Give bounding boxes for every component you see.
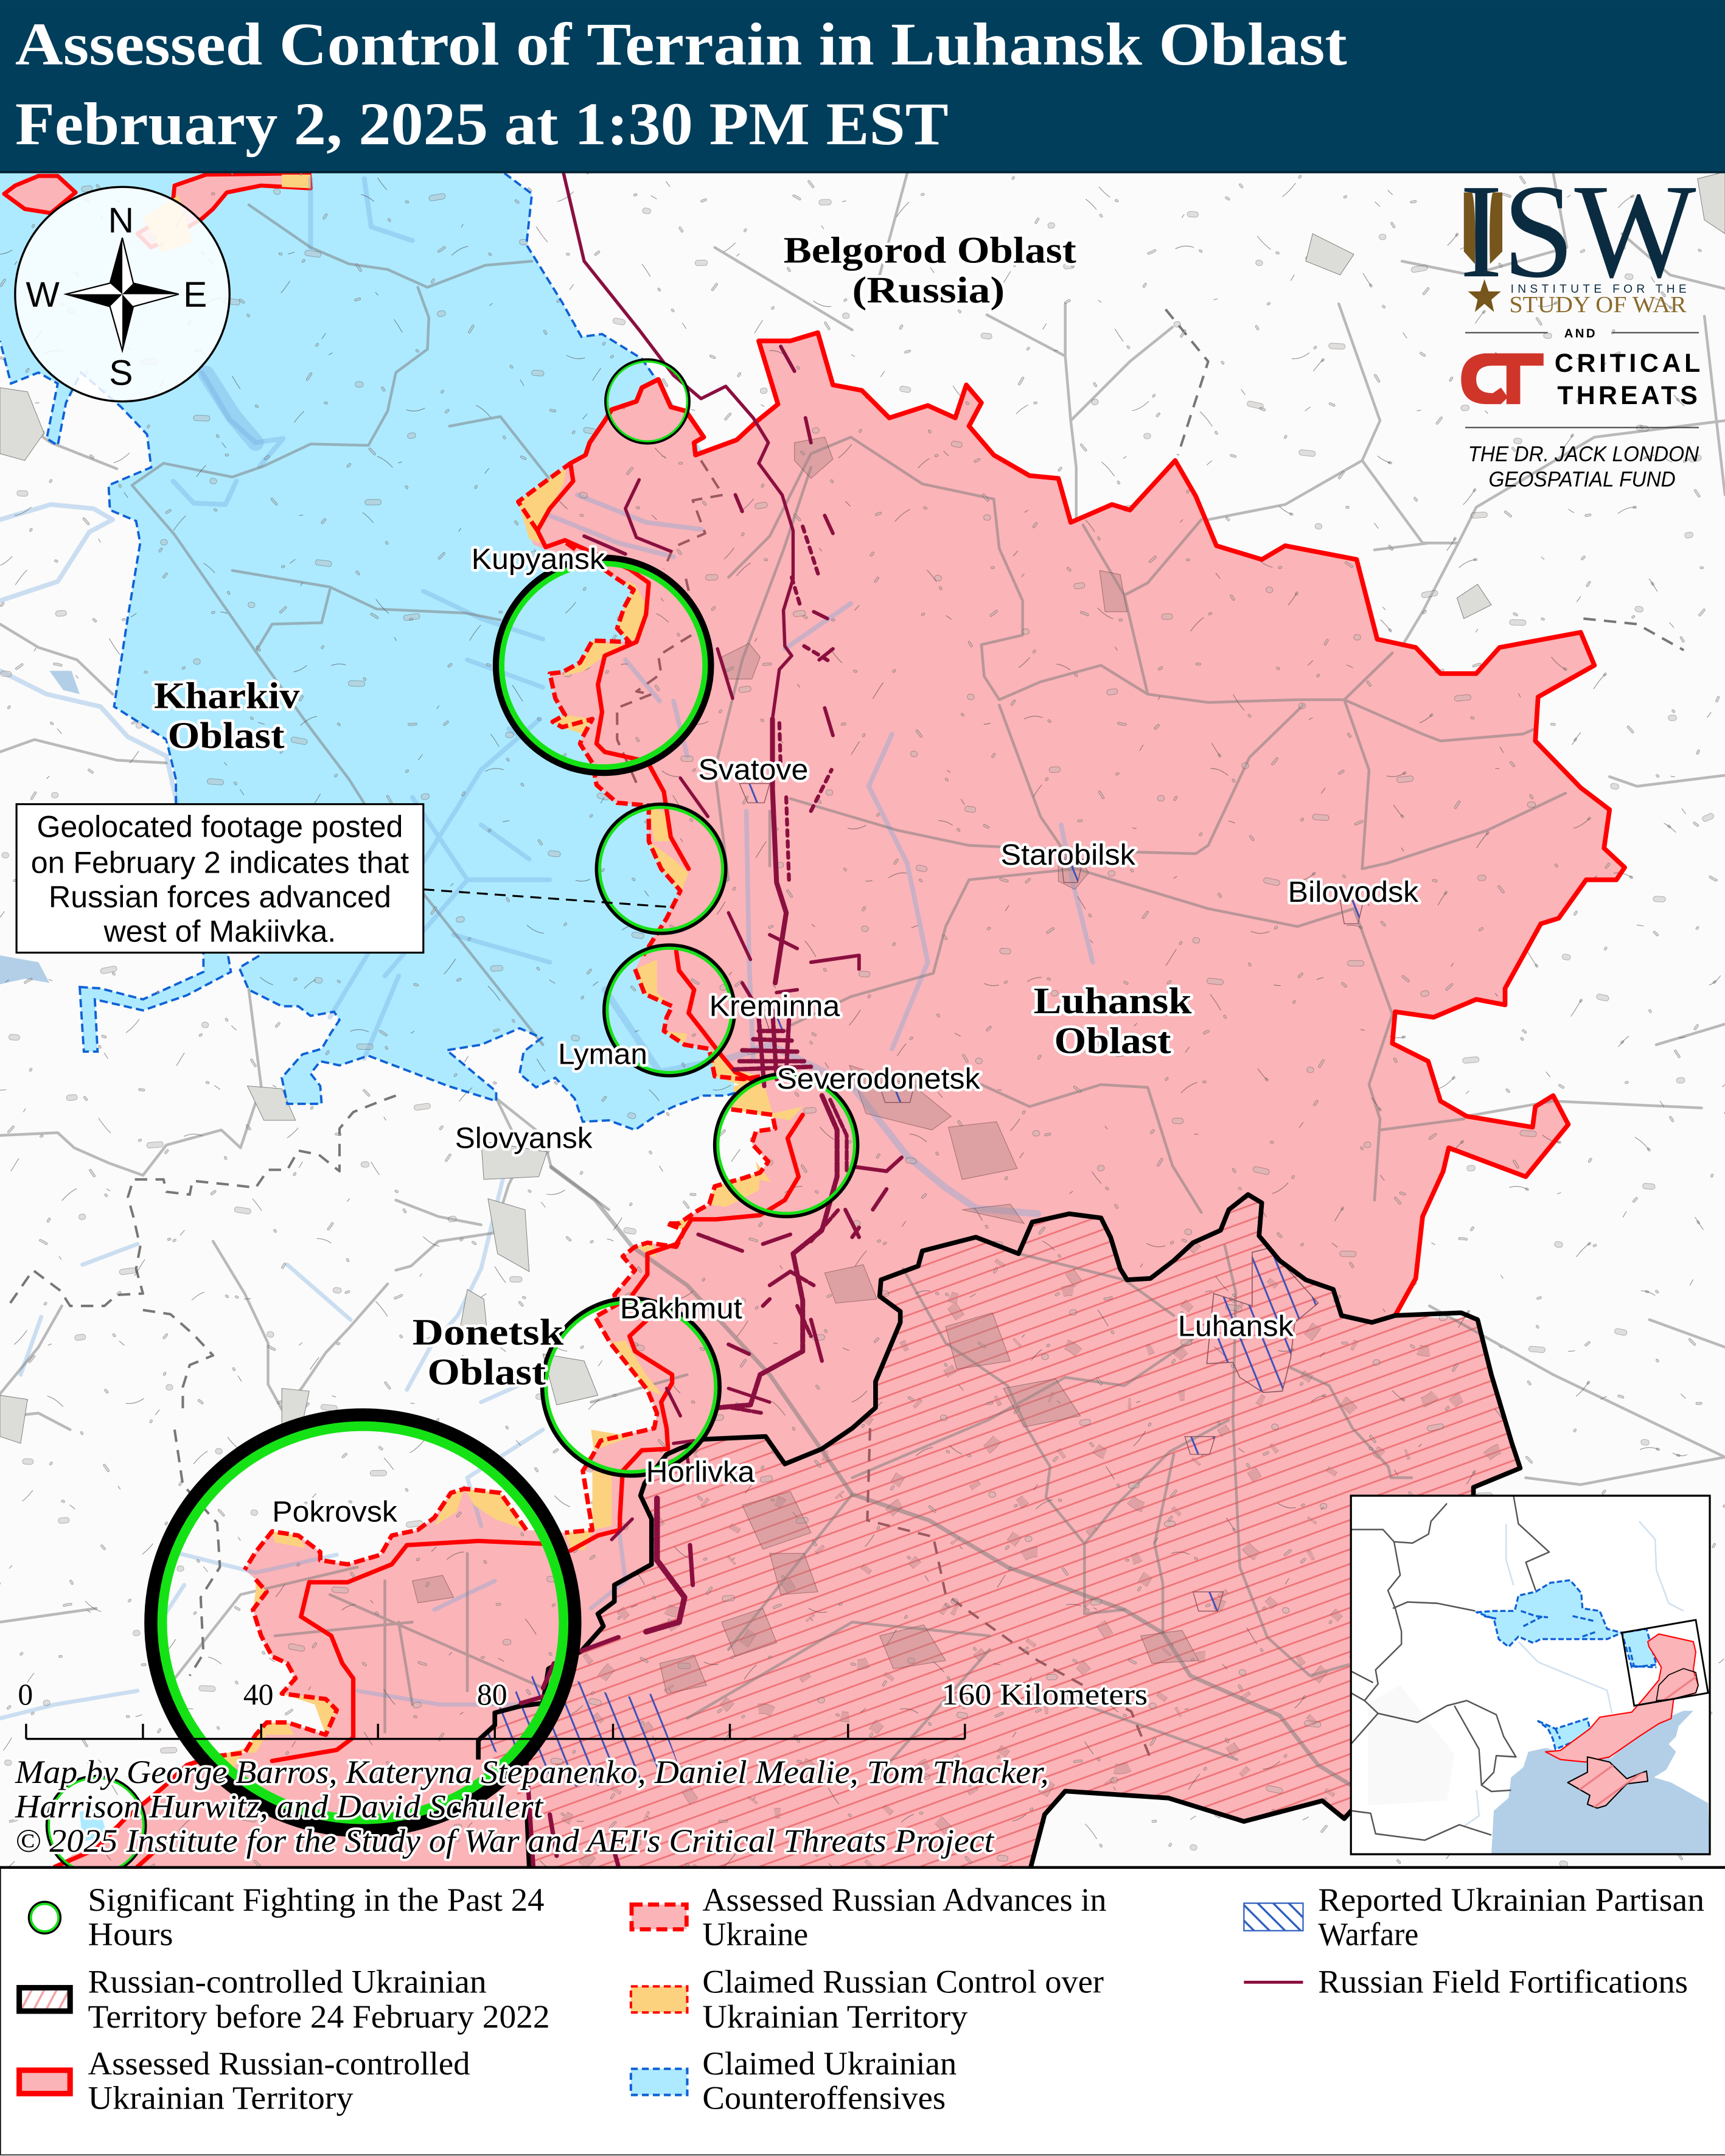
pre-2022 line of control [478, 1195, 1520, 1867]
inset: area of interest box [1622, 1620, 1708, 1706]
legend item: claimed Ukrainian counteroffensives: Counteroffensives [702, 2079, 946, 2116]
city label: Svatove: Svatove [699, 753, 808, 786]
inset: counteroffensive interior lines [1484, 1611, 1656, 1739]
legend item: Russian advances: Ukraine [702, 1916, 808, 1952]
callout: Makiivka advance: Geolocated footage posted [37, 810, 403, 844]
scale bar [18, 1678, 1148, 1739]
rivers [0, 179, 1093, 1718]
scale bar: 0 [18, 1678, 33, 1711]
Critical Threats logo [1461, 349, 1700, 410]
compass rose [15, 187, 229, 402]
legend item: assessed Russian control: Ukrainian Territory [88, 2079, 354, 2116]
header banner: Assessed Control of Terrain in Luhansk Oblast [15, 11, 1347, 78]
legend item: significant fighting: Hours [88, 1916, 173, 1952]
fighting circle: southwest [47, 1776, 145, 1875]
legend item: claimed Russian control: Ukrainian Territory [702, 1998, 967, 2035]
city label: Horlivka: Horlivka [646, 1456, 754, 1488]
legend item: Ukrainian partisan warfare: Reported Ukrainian Partisan [1318, 1882, 1704, 1918]
fighting circle: Kupyansk [496, 558, 711, 773]
lakes west of Kharkiv Oblast [0, 671, 80, 984]
oblast boundaries [9, 309, 1684, 1758]
scale bar: 160 Kilometers [941, 1678, 1148, 1711]
hatching: Russian-controlled territory before 24 February 2022 [478, 1195, 1520, 1867]
legend item: Ukrainian partisan warfare [1244, 1882, 1704, 1952]
region label: Kharkiv Oblast: Kharkiv [154, 675, 300, 716]
inset: sea [1477, 1711, 1710, 1854]
callout: Makiivka advance: on February 2 indicates that [31, 845, 409, 879]
city label: Luhansk: Luhansk [1178, 1310, 1294, 1343]
urban areas on occupied territory [413, 437, 1199, 1694]
header banner: February 2, 2025 at 1:30 PM EST [15, 91, 949, 158]
inset: occupied territory [1546, 1634, 1698, 1762]
inset: Crimea [1567, 1757, 1648, 1808]
ISW logo: STUDY OF WAR [1509, 292, 1687, 318]
callout: Makiivka advance: Russian forces advanced [49, 880, 391, 914]
Critical Threats logo: THREATS [1557, 381, 1698, 410]
Critical Threats logo: CRITICAL [1555, 349, 1700, 378]
assessed Russian control: inner front lines [55, 455, 803, 1867]
legend item: significant fighting [29, 1882, 545, 1952]
terrain: Ukrainian-claimed counteroffensive area [0, 173, 736, 1130]
Jack London Geospatial Fund credit: THE DR. JACK LONDON [1468, 442, 1699, 466]
city label: Pokrovsk: Pokrovsk [272, 1496, 398, 1529]
region label: Donetsk Oblast: Donetsk [413, 1312, 563, 1353]
callout: Makiivka advance [16, 804, 423, 952]
region label: Luhansk Oblast [1034, 981, 1192, 1061]
assessed Russian advances: dashed front line [212, 463, 775, 1757]
roads [0, 173, 1725, 1787]
compass rose: S [109, 354, 133, 393]
header banner [0, 0, 1725, 173]
Jack London Geospatial Fund credit [1465, 428, 1699, 492]
scale bar: 80 [477, 1678, 507, 1711]
fighting circle: Severodonetsk [715, 1073, 858, 1216]
map credits: Harrison Hurwitz, and David Schulert [15, 1788, 544, 1824]
inset: rivers [1464, 1521, 1684, 1826]
region label: Luhansk Oblast: Oblast [1054, 1020, 1171, 1061]
callout leader line [423, 890, 674, 907]
ISW logo: INSTITUTE FOR THE [1511, 283, 1687, 296]
region label: Kharkiv Oblast [154, 675, 300, 756]
legend item: claimed Russian control: Claimed Russian Control over [702, 1963, 1104, 2000]
legend item: pre-2022 Russian control: Russian-controlled Ukrainian [88, 1963, 487, 2000]
inset: international borders [1351, 1496, 1549, 1840]
region label: Luhansk Oblast: Luhansk [1034, 981, 1192, 1022]
region label: Belgorod Oblast (Russia): (Russia) [852, 270, 1005, 311]
fighting circle: north border [605, 360, 689, 444]
Jack London Geospatial Fund credit: GEOSPATIAL FUND [1488, 468, 1676, 492]
legend item: claimed Ukrainian counteroffensives: Claimed Ukrainian [702, 2045, 957, 2082]
legend item: Ukrainian partisan warfare: Warfare [1318, 1916, 1418, 1952]
legend item: claimed Russian control [631, 1963, 1104, 2035]
city label: Slovyansk: Slovyansk [455, 1122, 593, 1154]
region label: Donetsk Oblast [413, 1312, 563, 1393]
Russian field fortifications [521, 173, 902, 1867]
claimed Russian control areas [212, 467, 803, 1768]
legend item: assessed Russian control: Assessed Russian-controlled [88, 2045, 470, 2082]
fighting circle: Lyman [604, 945, 734, 1076]
fighting circle: Pokrovsk [151, 1415, 574, 1830]
legend panel [0, 1866, 1725, 2155]
inset: pre-2022 Donbas [1656, 1669, 1698, 1701]
legend item: assessed Russian control [19, 2045, 470, 2116]
legend item: Russian advances [632, 1882, 1106, 1952]
ISW logo: ISW [1460, 156, 1696, 305]
city label: Lyman: Lyman [558, 1038, 647, 1070]
legend item: Russian advances: Assessed Russian Advances in [702, 1882, 1106, 1918]
major urban areas [0, 172, 1725, 1443]
legend item: pre-2022 Russian control [19, 1963, 550, 2035]
map credits: © 2025 Institute for the Study of War and AEI's Critical Threats Project [15, 1823, 995, 1859]
city label: Severodonetsk: Severodonetsk [776, 1062, 980, 1095]
claimed Ukrainian counteroffensive dashed border [0, 173, 736, 1130]
terrain: Russian-controlled Ukrainian territory [55, 333, 1625, 1867]
scale bar: 40 [243, 1678, 274, 1711]
fortification cluster near Rubizhne [734, 1010, 811, 1086]
region label: Belgorod Oblast (Russia): Belgorod Oblast [784, 230, 1077, 271]
compass rose: E [183, 275, 207, 315]
legend item: Russian field fortifications: Russian Field Fortifications [1318, 1963, 1688, 2000]
Ukrainian partisan warfare hatching [484, 784, 1364, 1787]
region label: Belgorod Oblast (Russia) [784, 230, 1077, 311]
inset locator map of Ukraine [1351, 1496, 1710, 1854]
fighting circle: Makiivka [596, 804, 726, 933]
compass rose: W [26, 275, 60, 315]
city label: Kupyansk: Kupyansk [472, 543, 605, 576]
legend item: pre-2022 Russian control: Territory before 24 February 2022 [88, 1998, 550, 2035]
city label: Kreminna: Kreminna [709, 989, 840, 1022]
ISW logo: AND [1564, 327, 1597, 341]
dense urban settlements in occupied Donbas [529, 1198, 1501, 1866]
legend item: claimed Ukrainian counteroffensives [631, 2045, 957, 2116]
Russian-controlled territory solid border [585, 333, 1625, 1316]
terrain: Sumy border Russian-held pockets [4, 173, 311, 253]
scattered settlements: blobs [0, 170, 1711, 1883]
compass rose: N [108, 201, 134, 240]
callout: Makiivka advance: west of Makiivka. [103, 914, 336, 948]
legend item: significant fighting: Significant Fighting in the Past 24 [88, 1882, 545, 1918]
map credits: Map by George Barros, Kateryna Stepanenko, Daniel Mealie, Tom Thacker, [15, 1754, 1049, 1790]
region label: Donetsk Oblast: Oblast [428, 1352, 546, 1393]
inset: terrain shading [1368, 1685, 1454, 1805]
city label: Bakhmut: Bakhmut [620, 1292, 742, 1325]
inset: claimed Ukrainian counteroffensive areas [1477, 1580, 1656, 1750]
fighting circle: Bakhmut [542, 1299, 720, 1476]
city label: Starobilsk: Starobilsk [1001, 839, 1136, 871]
map credits [15, 1754, 1049, 1859]
city label: Bilovodsk: Bilovodsk [1288, 876, 1419, 909]
region label: Kharkiv Oblast: Oblast [168, 716, 285, 756]
